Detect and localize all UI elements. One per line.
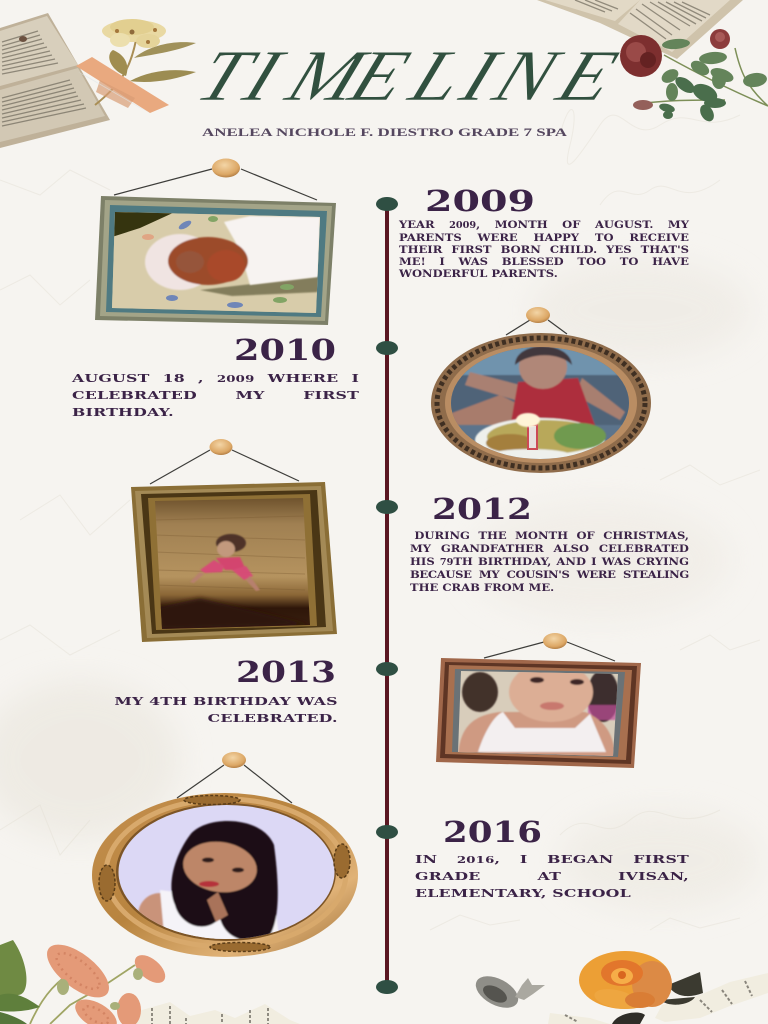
text: 2013 description: CELEBRATED. xyxy=(208,711,338,725)
flowers: bottom left xyxy=(0,935,170,1024)
year: 2009: 2009 xyxy=(425,184,535,218)
text: 2010 description: AUGUST 18 , 2009 WHERE I xyxy=(72,371,359,385)
text: 2012 description: HIS 79TH BIRTHDAY, AND I WAS CRYING xyxy=(410,556,689,568)
title: TIMELINE xyxy=(186,36,628,117)
year: 2016: 2016 xyxy=(443,815,542,849)
text: 2009 description xyxy=(398,219,690,280)
rose branch xyxy=(620,29,768,124)
text: 2013 description xyxy=(115,694,338,725)
torn paper: bottom left xyxy=(125,1002,300,1024)
photo frame: 2012 wood floor xyxy=(131,439,337,642)
book: top right xyxy=(537,0,743,59)
text: 2010 description xyxy=(72,371,359,419)
photo frame: 2009 newborn xyxy=(95,158,336,325)
washi tape xyxy=(76,57,169,113)
year: 2012: 2012 xyxy=(432,492,532,526)
text: 2009 description: ME! I WAS BLESSED TOO TO HAVE xyxy=(399,256,689,268)
year: 2013: 2013 xyxy=(236,655,336,689)
subtitle: ANELEA NICHOLE F. DIESTRO GRADE 7 SPA xyxy=(202,127,568,139)
text: 2010 description: CELEBRATED MY FIRST xyxy=(72,388,359,402)
text: 2012 description: BECAUSE MY COUSIN'S WERE STEALING xyxy=(410,569,689,581)
text: 2016 description: ELEMENTARY, SCHOOL xyxy=(415,886,631,900)
butterfly xyxy=(471,970,545,1014)
text: 2010 description: BIRTHDAY. xyxy=(72,405,174,419)
year: 2010: 2010 xyxy=(234,333,336,367)
dried flower and leaves xyxy=(95,19,196,105)
torn paper: bottom right xyxy=(548,973,768,1024)
photo frame: 2010 first birthday xyxy=(431,307,651,473)
text: 2009 description: WONDERFUL PARENTS. xyxy=(399,268,558,280)
text: 2016 description: GRADE AT IVISAN, xyxy=(415,869,689,883)
text: 2009 description: YEAR 2009, MONTH OF AUGUST. MY xyxy=(399,219,689,231)
rose: orange xyxy=(579,951,703,1024)
book: top left xyxy=(0,13,110,148)
text: 2016 description: IN 2016, I BEGAN FIRST xyxy=(415,852,689,866)
text: 2012 description: THE CRAB FROM ME. xyxy=(410,582,554,594)
photo frame: 2013 portrait xyxy=(436,633,641,768)
text: 2012 description xyxy=(410,530,689,594)
timeline axis xyxy=(376,197,398,994)
photo frame: 2016 oval portrait xyxy=(92,752,358,957)
text: 2009 description: PARENTS WERE HAPPY TO RECEIVE xyxy=(399,232,689,244)
text: 2012 description: DURING THE MONTH OF CHRISTMAS, xyxy=(414,530,689,542)
text: 2013 description: MY 4TH BIRTHDAY WAS xyxy=(115,694,338,708)
text: 2009 description: THEIR FIRST BORN CHILD. YES THAT'S xyxy=(399,244,689,256)
text: 2016 description xyxy=(415,852,689,900)
text: 2012 description: MY GRANDFATHER ALSO CELEBRATED xyxy=(410,543,689,555)
